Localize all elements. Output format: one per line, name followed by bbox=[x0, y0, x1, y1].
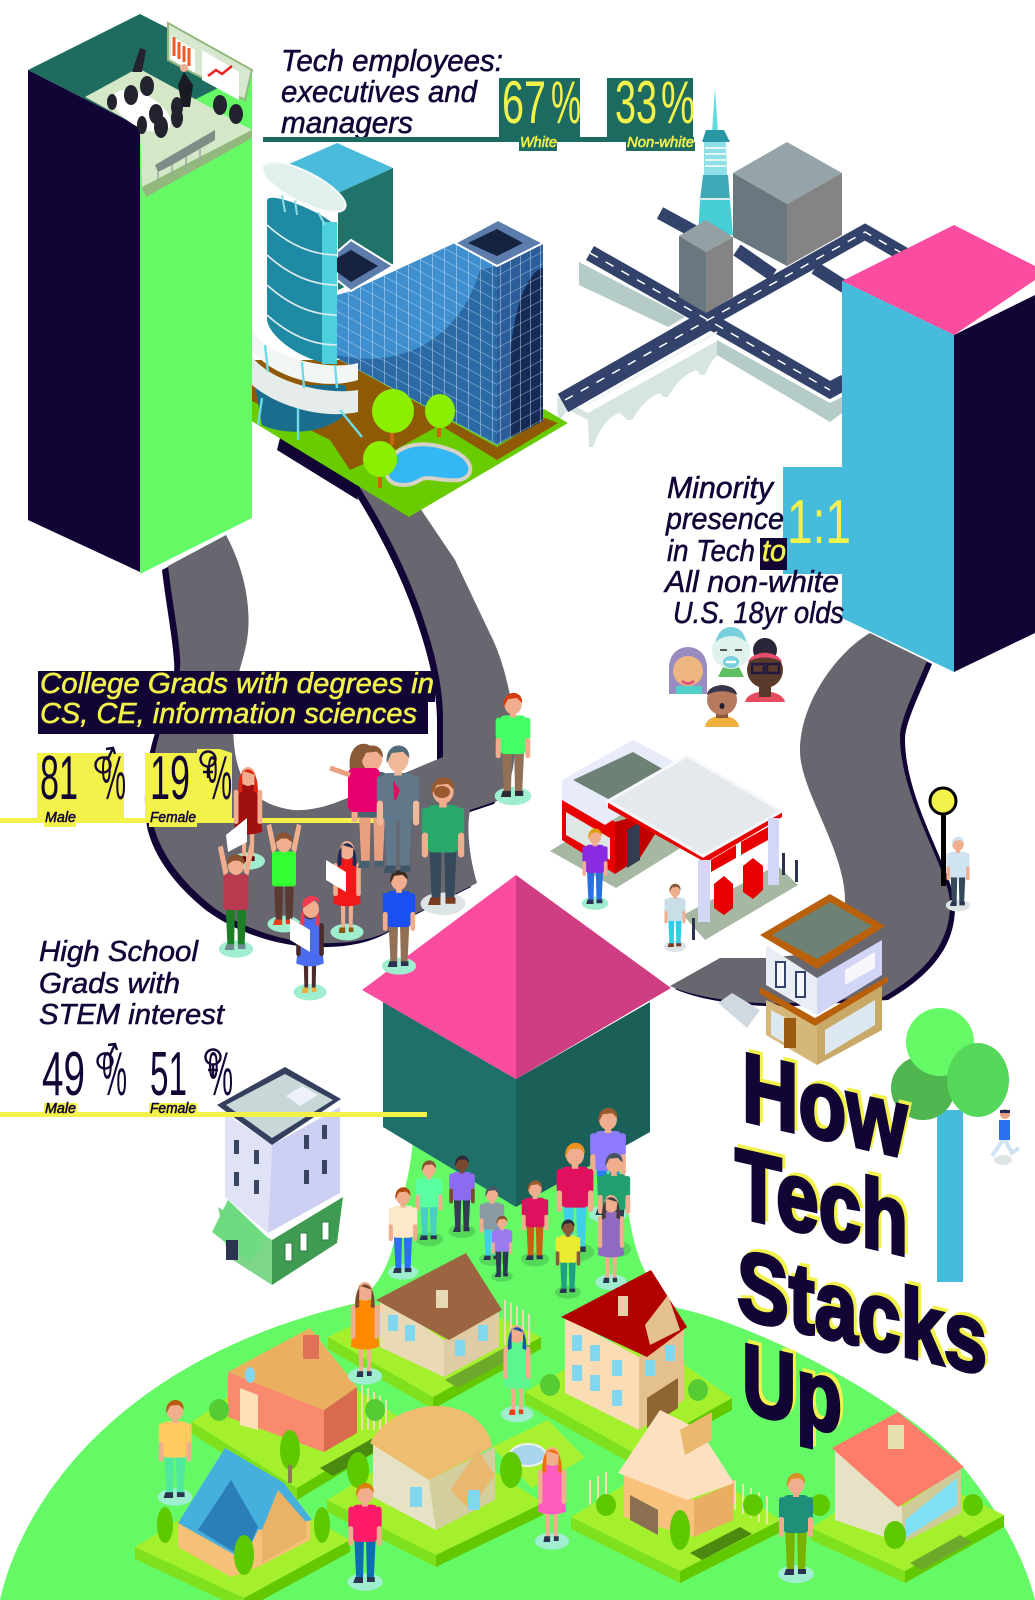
conference table and people bbox=[106, 81, 178, 141]
icon: female symbol bbox=[200, 752, 216, 778]
stat: minority presence: U.S. 18yr olds bbox=[673, 595, 844, 630]
icon: male symbol bbox=[96, 748, 115, 772]
stat: tech employees white / non-white bbox=[263, 69, 695, 151]
stat: tech employees white / non-white: % bbox=[551, 69, 581, 136]
back road bbox=[660, 213, 695, 232]
lavender building with green shop bbox=[212, 1067, 343, 1285]
yellow rule: college grads bbox=[0, 818, 383, 823]
railing bbox=[588, 332, 717, 404]
back teal building bbox=[289, 143, 393, 290]
round glass tower bbox=[252, 153, 362, 440]
road: left loop and centre road bbox=[145, 480, 515, 947]
heading: tech employees: Tech employees: bbox=[281, 43, 503, 78]
stat: minority presence: 1:1 bbox=[787, 488, 851, 557]
stat: high school grads: % bbox=[102, 1040, 127, 1109]
pond bbox=[386, 444, 470, 485]
face: woman bbox=[669, 647, 707, 694]
stat: high school grads: Grads with bbox=[39, 968, 180, 1000]
stat: minority presence: to bbox=[762, 533, 786, 568]
icon: female symbol bbox=[206, 1050, 220, 1076]
stat: tech employees white / non-white: 33 bbox=[615, 69, 657, 136]
stat: high school grads: % bbox=[208, 1040, 233, 1109]
stat: minority presence: All non-white bbox=[663, 564, 839, 599]
gas station bbox=[550, 740, 798, 940]
stat: minority presence: Minority bbox=[667, 470, 775, 505]
main road A bbox=[590, 253, 845, 390]
grey building small bbox=[679, 220, 733, 313]
bridge wall left bbox=[579, 262, 685, 327]
blue tower with pink top bbox=[783, 225, 1035, 672]
stat: high school grads: 49 bbox=[42, 1040, 85, 1109]
people in neighbourhood bbox=[158, 1282, 814, 1591]
icon: male symbol bbox=[98, 1044, 117, 1068]
tree bbox=[891, 1008, 1009, 1282]
heading: tech employees: executives and bbox=[281, 74, 479, 109]
house: red roof bbox=[525, 1270, 732, 1465]
people: street bbox=[582, 828, 970, 952]
plaza with pond bbox=[492, 1420, 585, 1488]
stat: tech employees white / non-white: Non-white bbox=[627, 134, 694, 151]
stat: tech employees white / non-white: White bbox=[520, 134, 557, 151]
bridge with arches bbox=[557, 341, 717, 447]
stat: minority presence bbox=[663, 470, 851, 630]
city road grid with bridges bbox=[557, 213, 905, 447]
stat: tech employees white / non-white: 67 bbox=[502, 69, 546, 136]
face: person with glasses bbox=[745, 638, 785, 702]
title: Tech bbox=[735, 1128, 908, 1278]
title: Up bbox=[742, 1323, 842, 1456]
stat: college grads: 19 bbox=[150, 744, 190, 813]
teal house body with pink roof bbox=[362, 875, 671, 1207]
house: orange roof bbox=[192, 1328, 406, 1500]
main road B bridge section bbox=[563, 320, 708, 403]
stat: high school grads: Male bbox=[45, 1100, 76, 1117]
title bbox=[735, 1032, 987, 1456]
grey building large bbox=[733, 142, 842, 266]
stat: college grads: Male bbox=[45, 809, 76, 826]
icon: four faces bbox=[669, 627, 785, 727]
stat: college grads: Female bbox=[150, 809, 196, 826]
stat: college grads: % bbox=[207, 744, 232, 813]
face: older man bbox=[712, 627, 750, 677]
people: road group bbox=[218, 693, 531, 1000]
stat: college grads: College Grads with degrees in bbox=[40, 668, 434, 700]
heading: tech employees: managers bbox=[281, 105, 413, 140]
stat: high school grads: Female bbox=[150, 1100, 196, 1117]
stat: high school grads: STEM interest bbox=[39, 999, 226, 1031]
bridge wall right bbox=[717, 340, 842, 422]
road: right bbox=[670, 633, 955, 1006]
house: peach L bbox=[571, 1410, 781, 1583]
heading: tech employees bbox=[281, 43, 503, 140]
green hill bbox=[0, 1135, 1035, 1600]
green tower with office on top bbox=[28, 14, 252, 574]
office wall with charts bbox=[168, 23, 252, 100]
house: brown roof bbox=[328, 1253, 541, 1409]
stat: minority presence: presence bbox=[665, 501, 784, 536]
icon: runner bbox=[992, 1109, 1019, 1165]
lamp post bbox=[930, 788, 956, 886]
crowd at house base bbox=[388, 1108, 631, 1299]
spire tower bbox=[698, 88, 733, 235]
house: arched roof bbox=[327, 1406, 543, 1567]
stat: high school grads bbox=[0, 936, 427, 1117]
stat: college grads: 81 bbox=[40, 744, 78, 813]
house on road bbox=[718, 894, 888, 1065]
trees around neighbourhood bbox=[157, 1374, 983, 1549]
title: How bbox=[742, 1032, 908, 1180]
stat: college grads: % bbox=[101, 744, 126, 813]
stat: college grads: CS, CE, information sciences bbox=[40, 698, 417, 730]
house: blue roof bbox=[135, 1448, 350, 1600]
trees on campus bbox=[363, 389, 455, 488]
blue glass office building bbox=[337, 220, 543, 445]
stat: high school grads: 51 bbox=[150, 1040, 187, 1109]
face: boy bbox=[705, 685, 739, 727]
office floor bbox=[85, 68, 252, 187]
stat: high school grads: High School bbox=[39, 936, 200, 968]
ground of tech campus bbox=[250, 360, 568, 517]
stat: tech employees white / non-white: % bbox=[661, 69, 695, 136]
stat: college grads bbox=[37, 668, 435, 827]
main road B bbox=[708, 232, 905, 320]
rows of chairs bbox=[155, 130, 215, 172]
neighbourhood houses bbox=[135, 1253, 1004, 1600]
house: coral roof bbox=[811, 1412, 1004, 1583]
stat: minority presence: in Tech bbox=[667, 533, 755, 568]
